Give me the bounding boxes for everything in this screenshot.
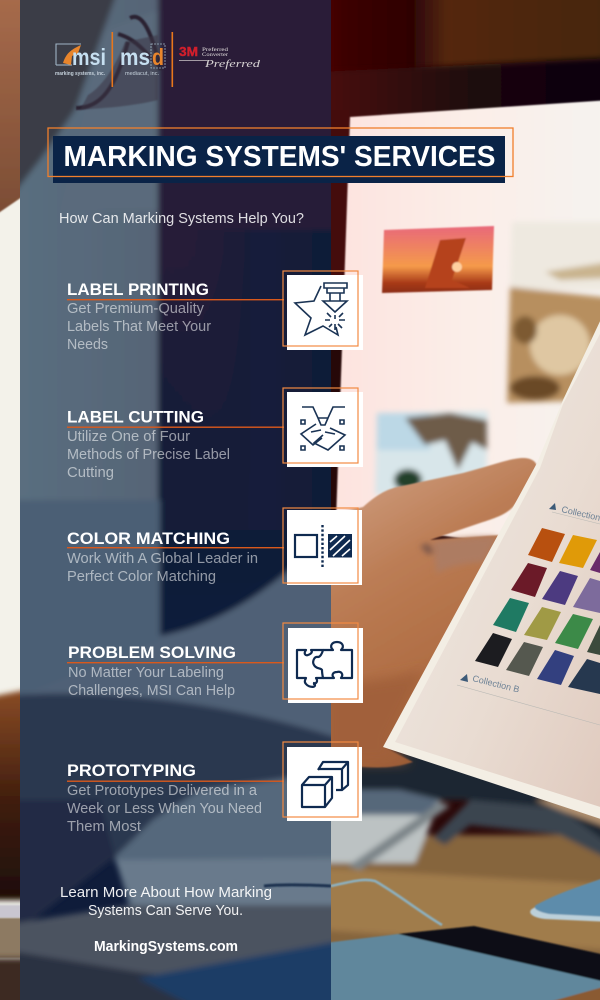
section: label printing: Needs xyxy=(67,337,108,353)
sunset photo xyxy=(382,226,494,293)
title xyxy=(48,128,513,183)
section: color matching xyxy=(67,508,362,585)
logo: msd: mediacut, inc. xyxy=(125,71,159,77)
logo: 3M preferred converter xyxy=(179,44,261,70)
section: problem solving: PROBLEM SOLVING xyxy=(68,643,236,662)
logo: msd: d xyxy=(152,44,164,70)
section: problem solving xyxy=(67,623,363,703)
swatches xyxy=(475,528,600,694)
title: MARKING SYSTEMS' SERVICES xyxy=(64,141,496,173)
section: prototyping xyxy=(67,742,362,835)
footer call to action: Learn More About How Marking xyxy=(60,885,272,901)
collection labels xyxy=(457,503,600,725)
section: problem solving: No Matter Your Labeling xyxy=(68,665,224,681)
section: label printing: Labels That Meet Your xyxy=(67,319,211,335)
palm photo xyxy=(375,411,488,495)
company logos xyxy=(55,32,261,87)
computer mouse xyxy=(530,876,600,922)
icon: laser marking a star xyxy=(283,271,363,350)
tablet xyxy=(325,926,600,1000)
eyeglass frame xyxy=(76,17,160,108)
section: color matching: COLOR MATCHING xyxy=(67,529,230,548)
section: label cutting: Utilize One of Four xyxy=(67,429,190,445)
section: problem solving: Challenges, MSI Can Help xyxy=(68,683,235,699)
footer call to action xyxy=(60,885,272,955)
subtitle: How Can Marking Systems Help You? xyxy=(59,210,304,227)
background: right photo with monitor, hand and desk xyxy=(315,0,600,1000)
section: label cutting: Methods of Precise Label xyxy=(67,447,230,463)
logo: 3M preferred converter: 3M xyxy=(179,44,198,59)
section: prototyping: Week or Less When You Need xyxy=(67,801,262,817)
section: prototyping: Them Most xyxy=(67,819,141,835)
logo: 3M preferred converter: Converter xyxy=(202,52,228,58)
section: label printing: LABEL PRINTING xyxy=(67,280,209,299)
colour swatch sheet xyxy=(383,300,600,822)
logo: msi: marking systems, inc. xyxy=(55,71,105,77)
translucent navy panel with tinted photo xyxy=(5,0,345,1000)
icon: cubes xyxy=(283,742,362,821)
section: color matching: Perfect Color Matching xyxy=(67,569,216,585)
desk cable xyxy=(331,880,442,925)
monitor screen xyxy=(336,100,600,560)
footer call to action: MarkingSystems.com xyxy=(94,938,238,955)
cable under panel xyxy=(264,885,331,886)
footer call to action: Systems Can Serve You. xyxy=(88,903,243,919)
section: prototyping: PROTOTYPING xyxy=(67,761,196,780)
icon: puzzle pieces xyxy=(283,623,363,703)
collection labels: Collection B xyxy=(472,673,521,695)
logo: msd: ms xyxy=(120,44,150,70)
logo: msi: msi xyxy=(72,44,106,70)
logo: msi xyxy=(55,44,106,77)
icon: colour comparison squares xyxy=(283,508,362,585)
section: prototyping: Get Prototypes Delivered in a xyxy=(67,783,258,799)
section: label printing: Get Premium-Quality xyxy=(67,301,205,317)
desk and stand xyxy=(331,750,600,955)
background: left photo strip xyxy=(0,0,20,1000)
section: label cutting xyxy=(67,388,363,481)
section: label cutting: LABEL CUTTING xyxy=(67,408,204,426)
icon: die cutting xyxy=(283,388,363,467)
hand xyxy=(325,458,537,767)
logo: 3M preferred converter: Preferred xyxy=(202,46,228,53)
beach photo xyxy=(507,222,600,403)
logo: 3M preferred converter: Preferred xyxy=(204,58,261,70)
logo: msd xyxy=(120,44,165,77)
section: label printing xyxy=(67,271,363,353)
section: label cutting: Cutting xyxy=(67,465,114,481)
section: color matching: Work With A Global Leader in xyxy=(67,551,258,567)
